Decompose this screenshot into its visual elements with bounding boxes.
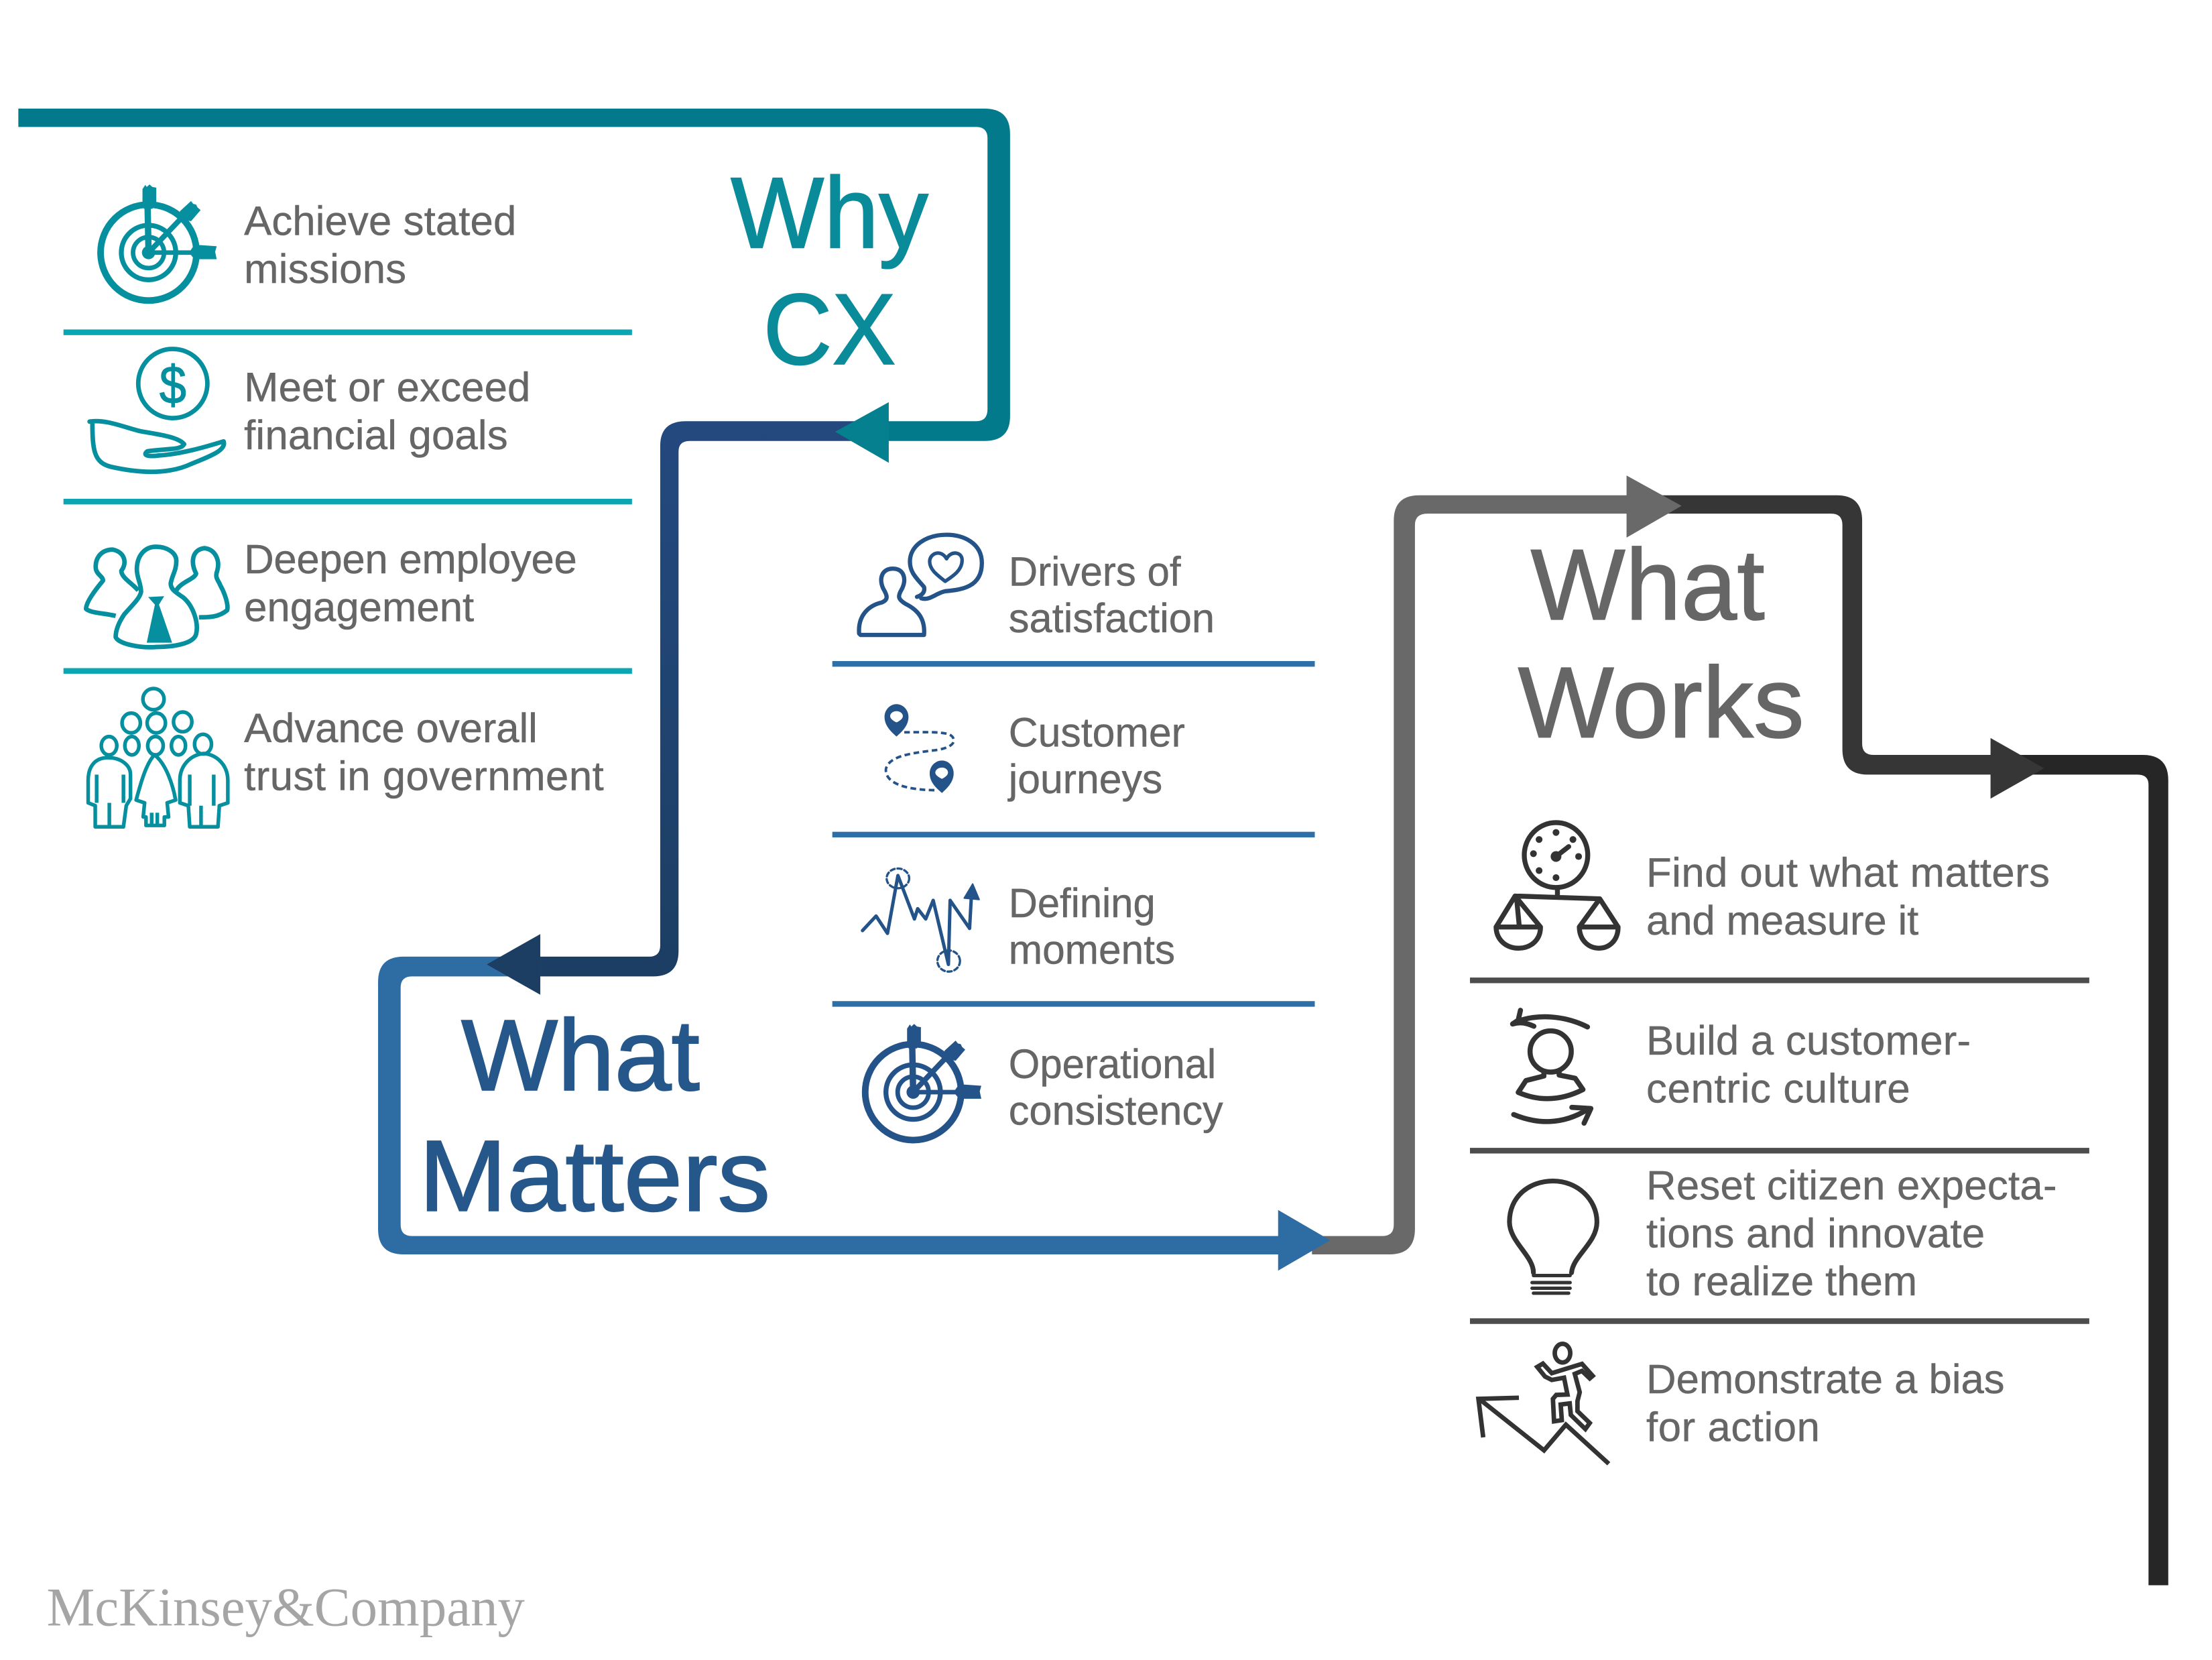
- icon: person with heart speech bubble: [859, 535, 982, 635]
- text: Achieve stated missions: missions: [244, 246, 406, 292]
- text: Reset citizen expectations and innovate to realize them: [1646, 1163, 2056, 1305]
- text: Advance overall trust in government: [244, 705, 604, 800]
- text: Meet or exceed financial goals: financial goals: [244, 412, 508, 459]
- logo: McKinsey & Company: McKinsey&Company: [46, 1576, 525, 1637]
- text: Deepen employee engagement: Deepen employee: [244, 536, 577, 583]
- text: Operational consistency: [1009, 1041, 1223, 1133]
- text: Deepen employee engagement: engagement: [244, 585, 474, 631]
- dividers: What Works: [1470, 977, 2089, 1324]
- heading: Why CX: CX: [763, 273, 896, 386]
- heading: Why CX: Why: [731, 156, 928, 269]
- dividers: Why CX: [64, 329, 632, 674]
- text: Drivers of satisfaction: [1009, 548, 1215, 641]
- arrow: teal to navy: [835, 402, 889, 463]
- arrow: navy to blue: [487, 934, 540, 995]
- arrow: blue to grey: [1278, 1210, 1331, 1270]
- text: Operational consistency: Operational: [1009, 1041, 1216, 1087]
- text: Defining moments: [1009, 880, 1175, 972]
- icon: crowd of people: [88, 689, 228, 827]
- text: Meet or exceed financial goals: Meet or exceed: [244, 364, 530, 410]
- icon: gauge on balance scale: [1496, 823, 1618, 948]
- icon: runner on rising arrow: [1479, 1344, 1609, 1464]
- text: Demonstrate a bias for action: [1646, 1356, 2005, 1451]
- connector: black path: [2018, 755, 2168, 1586]
- icon: person circled by arrows: [1513, 1010, 1591, 1123]
- icon: dollar coin over hand: $: [160, 355, 186, 414]
- connector: blue path: [378, 957, 1298, 1254]
- text: Meet or exceed financial goals: [244, 364, 530, 459]
- icon: line chart with defining moments: [863, 868, 979, 971]
- icon: dollar coin over hand: [90, 349, 224, 472]
- icon: light bulb: [1510, 1181, 1597, 1293]
- heading: Why CX: [731, 156, 928, 386]
- arrow: dark to black: [1991, 738, 2044, 798]
- panel: What Matters: [419, 535, 1314, 1232]
- text: Build a customer-centric culture: [1646, 1018, 1971, 1112]
- text: Reset citizen expectations and innovate to realize them: tions and innovate: [1646, 1210, 1985, 1256]
- text: Customer journeys: journeys: [1007, 756, 1162, 802]
- text: Drivers of satisfaction: Drivers of: [1009, 548, 1182, 594]
- heading: What Matters: [419, 999, 770, 1232]
- text: Build a customer-centric culture: centric culture: [1646, 1066, 1910, 1112]
- text: Find out what matters and measure it: and measure it: [1646, 898, 1918, 944]
- heading: What Works: [1518, 528, 1804, 759]
- heading: What Matters: Matters: [419, 1120, 770, 1232]
- text: Achieve stated missions: Achieve stated: [244, 198, 516, 244]
- text: Advance overall trust in government: trust in government: [244, 754, 604, 800]
- icon: journey between map pins: [885, 704, 954, 793]
- heading: What Works: Works: [1518, 646, 1804, 759]
- connector: grey path: [1312, 495, 1650, 1254]
- heading: What Matters: What: [461, 999, 700, 1112]
- connector: dark path: [1650, 495, 2018, 774]
- text: Find out what matters and measure it: [1646, 850, 2050, 944]
- connector: navy path: [522, 421, 861, 976]
- text: Demonstrate a bias for action: Demonstrate a bias: [1646, 1356, 2005, 1403]
- text: Customer journeys: [1007, 709, 1185, 802]
- connector: teal path: [18, 109, 1010, 441]
- text: Achieve stated missions: [244, 198, 516, 292]
- icon: three employees: [86, 547, 227, 647]
- text: Drivers of satisfaction: satisfaction: [1009, 595, 1215, 641]
- text: Build a customer-centric culture: Build a customer-: [1646, 1018, 1971, 1064]
- dividers: What Matters: [833, 661, 1314, 1007]
- text: Customer journeys: Customer: [1009, 709, 1185, 755]
- heading: What Works: What: [1530, 528, 1765, 641]
- text: Demonstrate a bias for action: for action: [1646, 1405, 1820, 1451]
- icon: target with arrows: [101, 184, 217, 300]
- text: Defining moments: moments: [1009, 927, 1175, 972]
- text: Reset citizen expectations and innovate to realize them: to realize them: [1646, 1258, 1917, 1305]
- arrow: grey to dark: [1627, 475, 1682, 538]
- text: Defining moments: Defining: [1009, 880, 1156, 926]
- text: Find out what matters and measure it: Find out what matters: [1646, 850, 2050, 896]
- text: Advance overall trust in government: Advance overall: [244, 705, 538, 752]
- text: Operational consistency: consistency: [1009, 1087, 1223, 1133]
- panel: Why CX: [64, 156, 928, 827]
- icon: target with arrows: [865, 1024, 981, 1140]
- text: Reset citizen expectations and innovate to realize them: Reset citizen expecta-: [1646, 1163, 2056, 1209]
- text: Deepen employee engagement: [244, 536, 577, 631]
- panel: What Works: [1470, 528, 2089, 1464]
